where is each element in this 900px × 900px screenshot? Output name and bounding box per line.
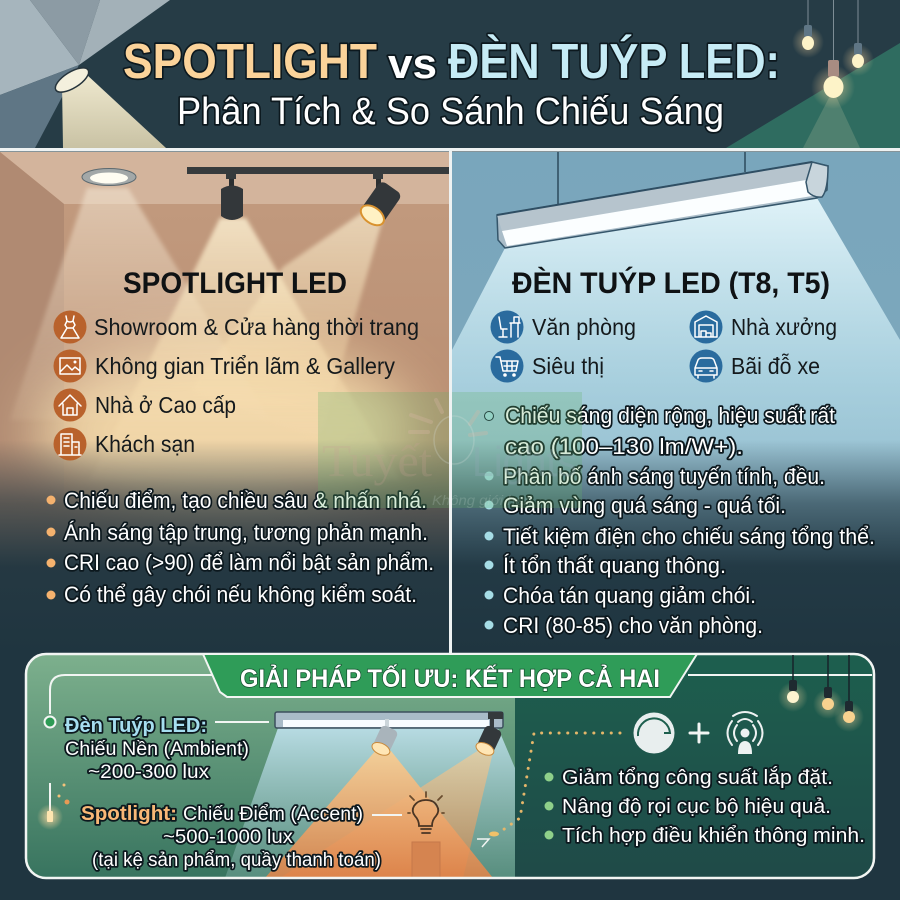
- icon: small sensor mark: [477, 832, 499, 847]
- list: features: CRI (80-85) cho văn phòng.: [503, 613, 763, 638]
- list: benefits: Giảm tổng công suất lắp đặt.: [562, 766, 833, 789]
- text: accent: Chiếu Điểm (Accent): [183, 804, 363, 825]
- heading: ĐÈN TUÝP LED (T8, T5): [512, 266, 830, 300]
- text: accent: (tại kệ sản phẩm, quầy thanh toán): [92, 850, 381, 871]
- icon: cart: [490, 350, 524, 382]
- panel: LED tube: [452, 152, 900, 652]
- list: features: CRI cao (>90) để làm nổi bật sản phẩm.: [64, 550, 434, 575]
- icon: track spot angled: [360, 174, 400, 226]
- banner: GIẢI PHÁP TỐI ƯU: KẾT HỢP CẢ HAI: [240, 663, 660, 693]
- dark fade: [452, 440, 900, 652]
- text: ambient: ~200-300 lux: [88, 762, 210, 783]
- icon: header hanging bulbs: [792, 0, 874, 148]
- label: office: Văn phòng: [532, 314, 636, 340]
- list: features: Chiếu điểm, tạo chiều sâu & nhấn nhá.: [64, 488, 427, 513]
- icon: hotel: [54, 428, 86, 460]
- icon: dress: [54, 310, 86, 344]
- list: benefits: Tích hợp điều khiển thông minh.: [562, 824, 865, 847]
- ceiling and wall: [0, 152, 449, 448]
- list: features: Chóa tán quang giảm chói.: [503, 583, 756, 608]
- list: benefits: [544, 766, 865, 847]
- icon: dimmer: [634, 712, 674, 754]
- title: ĐÈN TUÝP LED:: [448, 35, 780, 89]
- light beams: [10, 188, 415, 515]
- list: features: cao (100–130 lm/W+).: [505, 434, 743, 459]
- icon: track spot straight: [221, 174, 243, 220]
- label: homes: Nhà ở Cao cấp: [95, 392, 236, 418]
- list: applications: [54, 310, 419, 460]
- label: parking: Bãi đỗ xe: [731, 353, 820, 379]
- text: ambient: [65, 715, 249, 783]
- icon: light bulb: [408, 792, 444, 833]
- watermark: Tuyết: [322, 435, 432, 486]
- list: features: Phân bố ánh sáng tuyến tính, đều.: [503, 464, 825, 489]
- list: applications: [490, 310, 837, 382]
- text: accent: ~500-1000 lux: [163, 827, 294, 848]
- list: features: Chiếu sáng diện rộng, hiệu suất rất: [505, 403, 835, 428]
- list: features: Giảm vùng quá sáng - quá tối.: [503, 493, 786, 518]
- panel: spotlight LED: [0, 152, 449, 652]
- icon: picture: [54, 350, 86, 382]
- icon: house: [54, 388, 86, 422]
- node dot: [44, 716, 56, 728]
- subtitle: Phân Tích & So Sánh Chiếu Sáng: [177, 91, 724, 133]
- icon: warehouse: [690, 310, 722, 344]
- title: [123, 35, 780, 89]
- dotted connector: [500, 733, 620, 832]
- label: showroom: Showroom & Cửa hàng thời trang: [94, 314, 419, 340]
- icon: tube fixture: [497, 152, 828, 248]
- list: benefits: Nâng độ rọi cục bộ hiệu quả.: [562, 795, 831, 818]
- text: ambient: Đèn Tuýp LED:: [65, 715, 207, 737]
- list: features: Ít tổn thất quang thông.: [503, 553, 726, 578]
- list: features: Có thể gây chói nếu không kiểm soát.: [64, 582, 417, 607]
- text: accent: [81, 803, 381, 871]
- icon: motion sensor: [728, 712, 762, 754]
- connector lines: [50, 675, 872, 815]
- icon: tube with spots: [275, 712, 503, 758]
- label: gallery: Không gian Triển lãm & Gallery: [95, 353, 395, 379]
- title: SPOTLIGHT: [123, 35, 377, 89]
- watermark: [318, 392, 582, 508]
- list: features: [46, 488, 434, 607]
- text: ambient: Chiếu Nền (Ambient): [65, 739, 249, 760]
- label: hotels: Khách sạn: [95, 431, 195, 457]
- watermark: Lights: [472, 438, 577, 485]
- list: features: Tiết kiệm điện cho chiếu sáng tổng thể.: [503, 524, 875, 549]
- header band: [0, 0, 900, 148]
- light beam: [452, 198, 900, 503]
- panel divider: [449, 148, 452, 653]
- icon: header spotlight: [52, 63, 166, 148]
- label: factory: Nhà xưởng: [731, 314, 837, 340]
- icon: car: [690, 350, 722, 382]
- banner: [203, 654, 697, 697]
- icon: glowing lamp: [37, 784, 70, 830]
- icon: track rail: [187, 167, 449, 174]
- panel: combined solution: [26, 654, 874, 878]
- dark fade: [0, 440, 449, 652]
- icon: recessed downlight: [82, 168, 136, 186]
- label: supermarket: Siêu thị: [532, 353, 604, 379]
- icon: office: [490, 310, 524, 344]
- header divider: [0, 148, 900, 152]
- list: features: [484, 403, 875, 638]
- light beams: [225, 728, 515, 878]
- heading: SPOTLIGHT LED: [123, 267, 347, 300]
- title: vs: [388, 40, 437, 87]
- list: features: Ánh sáng tập trung, tương phản mạnh.: [64, 520, 428, 545]
- icon: hanging bulbs: [778, 655, 864, 732]
- text: accent: Spotlight:: [81, 803, 177, 825]
- icon: plus: [690, 724, 708, 742]
- watermark: Không giới hạn: [432, 492, 532, 508]
